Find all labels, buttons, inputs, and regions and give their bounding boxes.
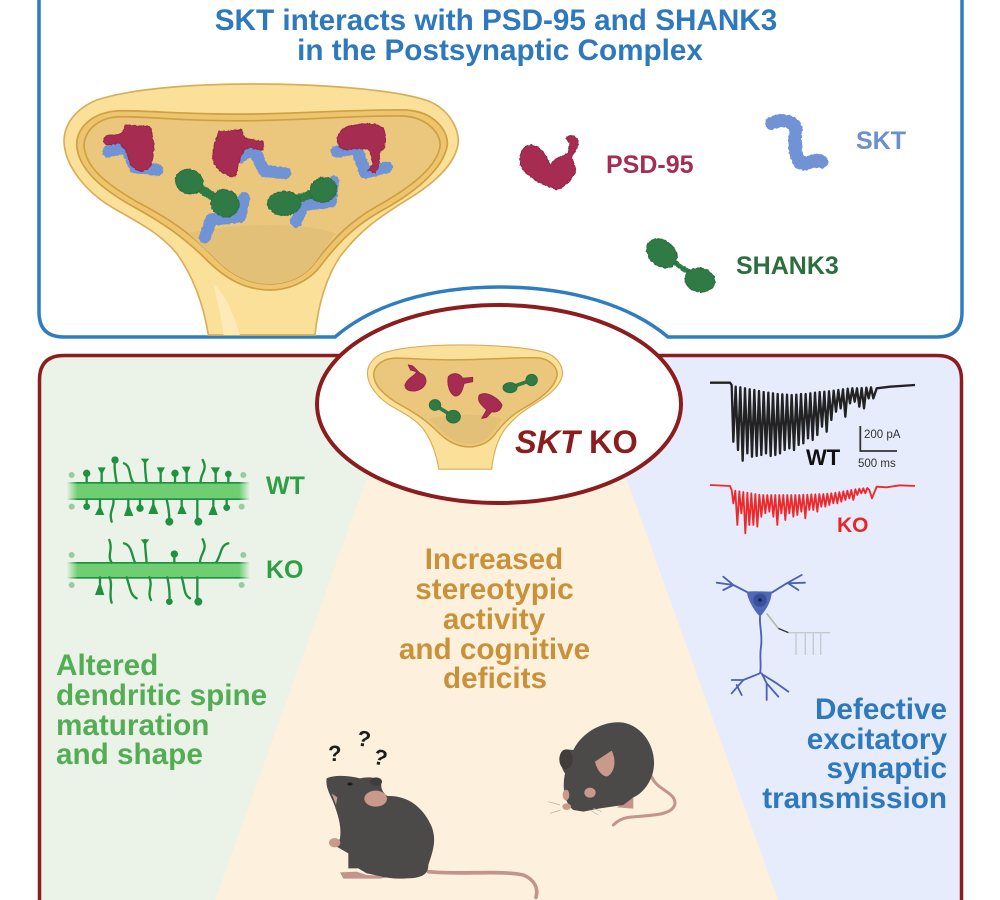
text: defective excitatory synaptic transmission: synaptic <box>827 752 947 785</box>
label: KO spines: KO <box>266 556 304 584</box>
question marks: ? <box>355 725 373 752</box>
text: altered spine maturation <box>56 649 267 771</box>
callout: SKT KO ellipse <box>317 305 681 503</box>
panel: SKT KO phenotypes <box>38 355 963 900</box>
legend: PSD-95 <box>520 136 694 189</box>
text: defective excitatory synaptic transmission <box>762 693 947 815</box>
chart: KO current trace <box>710 485 915 533</box>
title: in the Postsynaptic Complex <box>297 34 703 67</box>
text: defective excitatory synaptic transmission: Defective <box>815 693 947 726</box>
icon: rearing mouse <box>326 776 537 897</box>
legend: SHANK3: SHANK3 <box>736 252 839 280</box>
text: stereotypic activity and cognitive deficits <box>399 543 590 695</box>
label: WT trace: WT <box>806 445 841 470</box>
text: altered spine maturation: Altered <box>56 649 158 682</box>
legend: SKT: SKT <box>856 127 906 155</box>
text: altered spine maturation: dendritic spine <box>56 679 267 712</box>
dendritic spine with protein complexes <box>64 84 458 335</box>
chart: trace scale bar: 200 pA <box>864 429 901 441</box>
question marks: ? <box>328 741 341 766</box>
text: defective excitatory synaptic transmission: excitatory <box>807 723 947 756</box>
label: WT spines: WT <box>266 472 305 500</box>
icon: neuron with electrode <box>717 575 830 700</box>
legend: PSD-95: PSD-95 <box>606 151 694 179</box>
question marks: ? <box>371 744 390 771</box>
title <box>215 4 777 67</box>
text: stereotypic activity and cognitive deficits: stereotypic <box>415 573 574 606</box>
chart: trace scale bar <box>858 426 901 470</box>
panel: postsynaptic complex <box>39 0 962 337</box>
small dendritic spine without SKT <box>367 345 563 469</box>
text: stereotypic activity and cognitive deficits: and cognitive <box>399 633 590 666</box>
text: stereotypic activity and cognitive deficits: Increased <box>425 543 563 576</box>
text: stereotypic activity and cognitive deficits: deficits <box>443 662 547 695</box>
chart: dendritic spines WT <box>67 456 250 526</box>
text: defective excitatory synaptic transmission: transmission <box>762 782 947 815</box>
label: KO trace: KO <box>837 514 868 537</box>
chart: WT current trace <box>710 383 915 461</box>
legend: SKT <box>772 121 906 163</box>
text: altered spine maturation: maturation <box>56 709 209 742</box>
legend: SHANK3 <box>641 233 839 294</box>
question marks <box>328 725 390 771</box>
text: altered spine maturation: and shape <box>56 738 203 771</box>
label: SKT KO: SKT KO <box>515 424 638 460</box>
chart: dendritic spines KO <box>67 539 250 606</box>
chart: trace scale bar: 500 ms <box>858 458 896 470</box>
title: SKT interacts with PSD-95 and SHANK3 <box>215 4 777 37</box>
icon: hunched mouse <box>548 722 675 825</box>
text: stereotypic activity and cognitive deficits: activity <box>443 603 546 636</box>
